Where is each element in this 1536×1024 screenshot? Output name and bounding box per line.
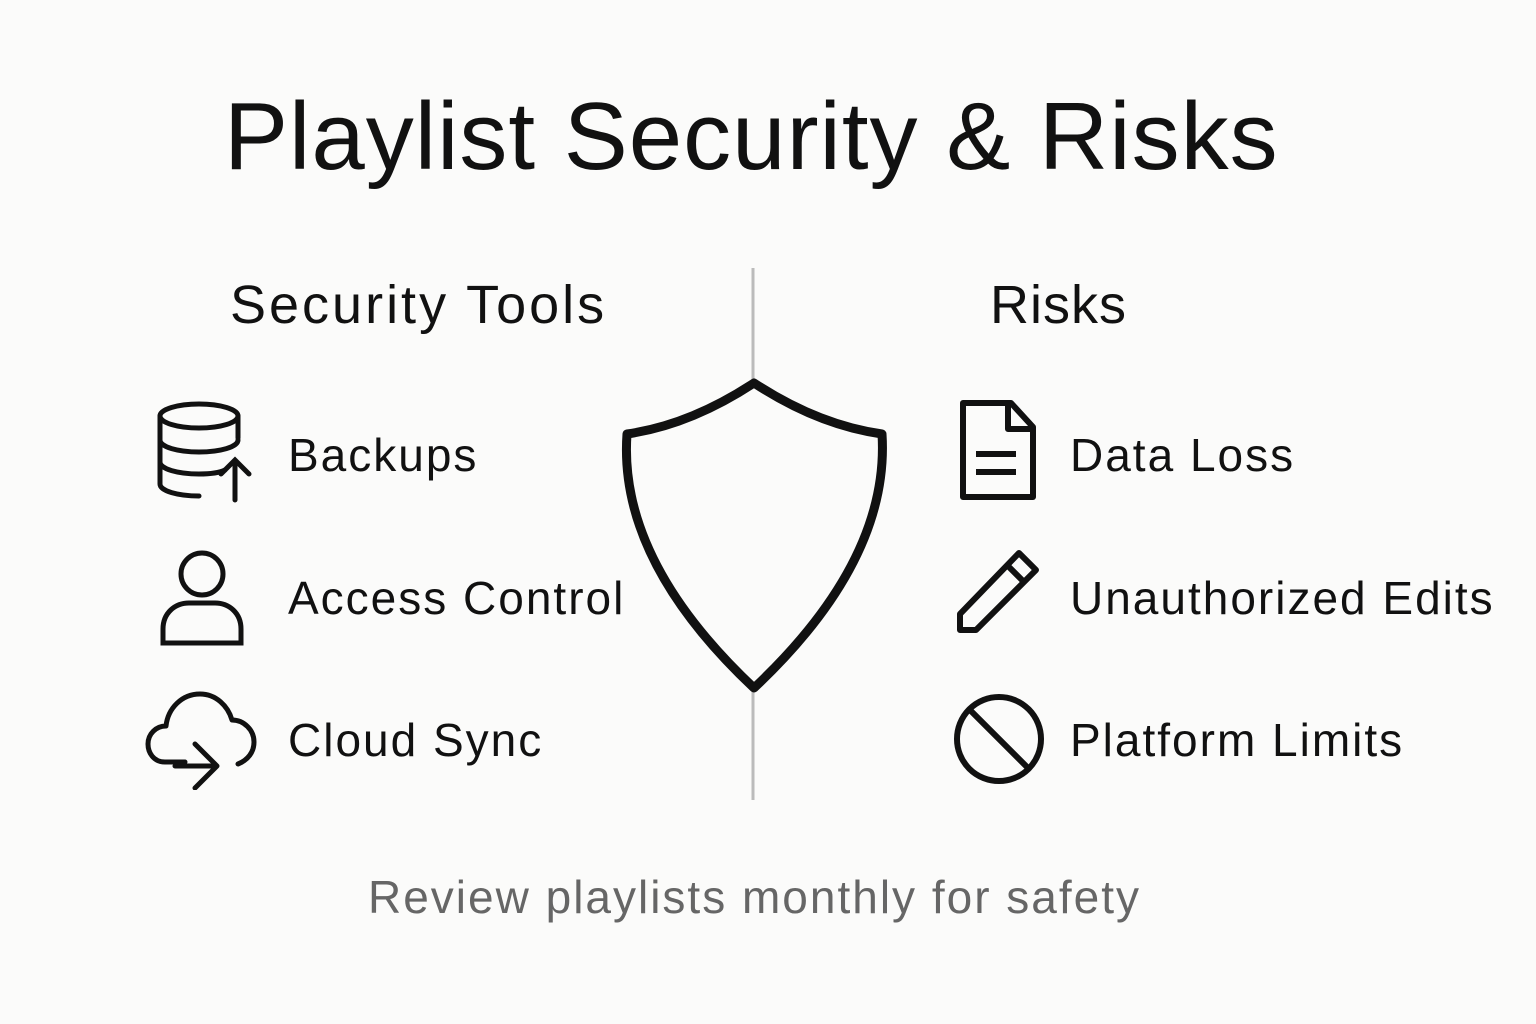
text: backups: Backups	[288, 429, 478, 481]
icon: cloud sync	[146, 692, 256, 790]
icon: pencil	[957, 550, 1039, 633]
icon: database backup	[158, 402, 252, 502]
heading: risks: Risks	[990, 275, 1127, 335]
heading: security tools: Security Tools	[230, 275, 607, 335]
text: unauthorized edits: Unauthorized Edits	[1070, 572, 1495, 624]
text: platform limits: Platform Limits	[1070, 714, 1404, 766]
footer note: Review playlists monthly for safety	[368, 871, 1141, 923]
title: Playlist Security & Risks	[224, 83, 1279, 190]
text: access control: Access Control	[288, 572, 625, 624]
text: cloud sync: Cloud Sync	[288, 714, 543, 766]
icon: user	[160, 550, 244, 646]
icon: document	[960, 400, 1036, 500]
icon: prohibited	[954, 694, 1044, 784]
icon: shield	[626, 383, 882, 688]
text: data loss: Data Loss	[1070, 429, 1295, 481]
